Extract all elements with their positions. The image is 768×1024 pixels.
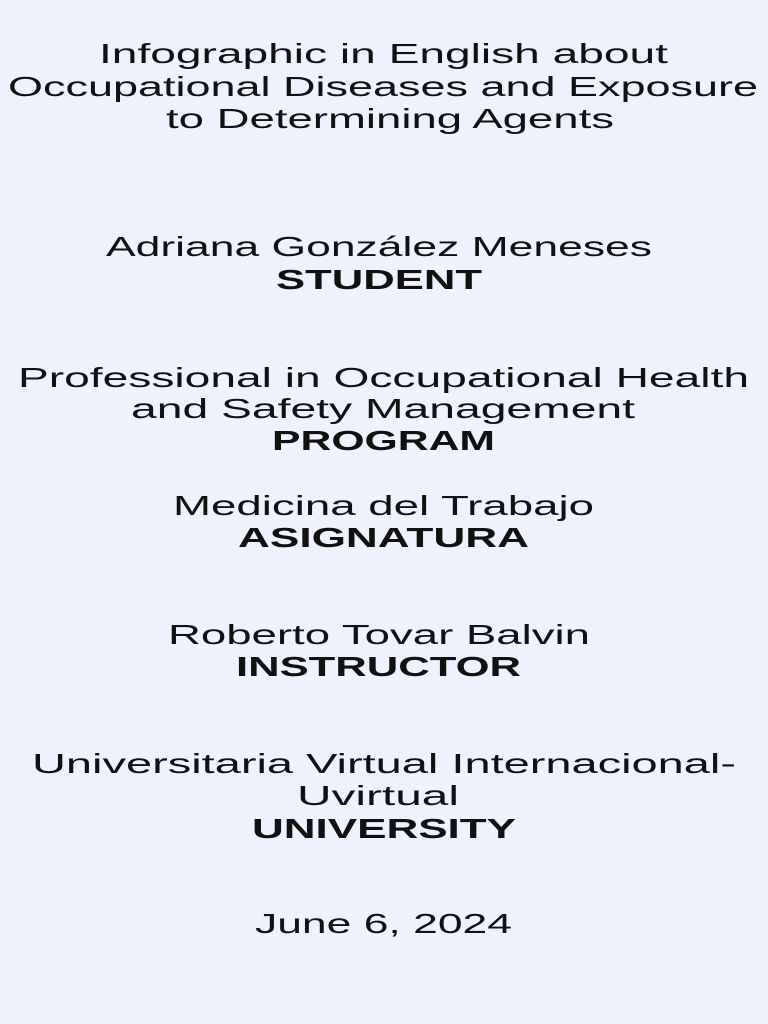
subject block: ASIGNATURA: [238, 522, 529, 553]
title: Occupational Diseases and Exposure: [8, 71, 758, 102]
university block: Uvirtual: [297, 780, 459, 811]
instructor block: Roberto Tovar Balvin: [168, 619, 590, 650]
subject block: Medicina del Trabajo: [173, 490, 594, 521]
title: Infographic in English about: [99, 38, 668, 69]
university block: Universitaria Virtual Internacional-: [32, 748, 736, 779]
date: June 6, 2024: [255, 908, 512, 939]
instructor block: [168, 619, 590, 682]
instructor block: INSTRUCTOR: [236, 651, 521, 682]
university block: [32, 748, 736, 844]
student block: Adriana González Meneses: [106, 231, 652, 262]
title: [8, 38, 758, 134]
student block: [106, 231, 652, 295]
program block: Professional in Occupational Health: [18, 362, 749, 393]
subject block: [173, 490, 594, 553]
title: to Determining Agents: [166, 103, 614, 134]
university block: UNIVERSITY: [252, 813, 517, 844]
program block: PROGRAM: [272, 425, 495, 456]
program block: and Safety Management: [131, 393, 635, 424]
program block: [18, 362, 749, 456]
student block: STUDENT: [276, 264, 482, 295]
